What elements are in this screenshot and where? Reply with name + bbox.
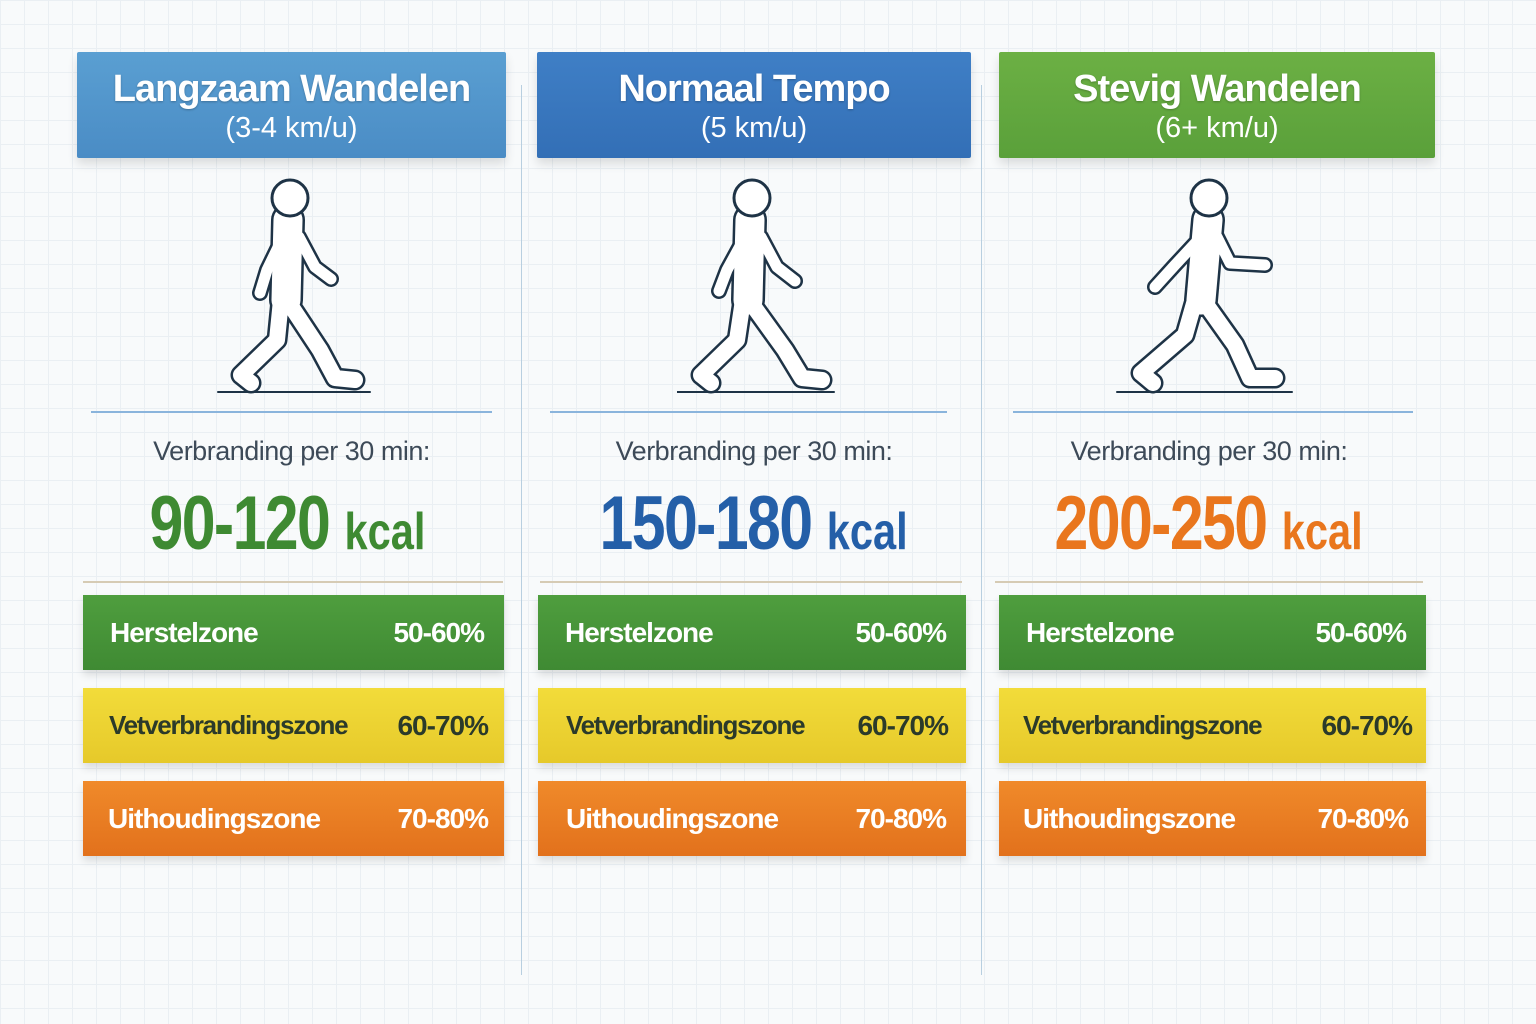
bar: Vetverbrandingszone: 60-70% <box>397 710 488 740</box>
header: Langzaam Wandelen <box>77 52 506 158</box>
bar: Vetverbrandingszone: 60-70% <box>1321 710 1412 740</box>
bar: Herstelzone <box>83 595 504 670</box>
zones column 3 <box>996 595 1428 864</box>
bar: Herstelzone <box>538 595 966 670</box>
bar: Uithoudingszone <box>538 781 966 856</box>
bar: Uithoudingszone: 70-80% <box>855 802 946 834</box>
kcal: 200-250: 200-250 kcal <box>1055 481 1363 566</box>
zones column 1 <box>80 595 506 864</box>
bar: Vetverbrandingszone: 60-70% <box>857 710 948 740</box>
bar: Vetverbrandingszone: Vetverbrandingszone <box>109 710 347 740</box>
header: Stevig Wandelen: (6+ km/u) <box>1155 112 1279 144</box>
text: burn label 1: Verbranding per 30 min: <box>153 436 430 466</box>
header: Stevig Wandelen: Stevig Wandelen <box>1073 68 1361 110</box>
icon: walker slow <box>217 178 371 394</box>
bar: Uithoudingszone: Uithoudingszone <box>566 802 778 834</box>
icon: walker normal <box>677 178 835 394</box>
bar: Uithoudingszone <box>999 781 1426 856</box>
bar: Uithoudingszone: 70-80% <box>397 802 488 834</box>
bar: Herstelzone: 50-60% <box>1315 616 1406 648</box>
bar: Vetverbrandingszone <box>999 688 1426 763</box>
header: Normaal Tempo: Normaal Tempo <box>618 68 890 110</box>
bar: Herstelzone <box>999 595 1426 670</box>
header: Stevig Wandelen <box>999 52 1435 158</box>
zones column 2 <box>536 595 968 864</box>
bar: Vetverbrandingszone: Vetverbrandingszone <box>1023 710 1261 740</box>
header: Normaal Tempo <box>537 52 971 158</box>
bar: Vetverbrandingszone <box>83 688 504 763</box>
bar: Herstelzone: Herstelzone <box>1026 616 1174 648</box>
icon: walker brisk <box>1116 178 1293 394</box>
bar: Uithoudingszone: 70-80% <box>1317 802 1408 834</box>
bar: Herstelzone: Herstelzone <box>110 616 258 648</box>
bar: Uithoudingszone: Uithoudingszone <box>1023 802 1235 834</box>
header: Normaal Tempo: (5 km/u) <box>701 112 807 144</box>
header: Langzaam Wandelen: Langzaam Wandelen <box>113 68 470 110</box>
kcal: 150-180: 150-180 kcal <box>600 481 908 566</box>
kcal: 90-120: 90-120 kcal <box>149 481 425 566</box>
bar: Vetverbrandingszone: Vetverbrandingszone <box>566 710 804 740</box>
header: Langzaam Wandelen: (3-4 km/u) <box>225 112 358 144</box>
bar: Uithoudingszone <box>83 781 504 856</box>
text: burn label 2: Verbranding per 30 min: <box>616 436 892 466</box>
bar: Herstelzone: Herstelzone <box>565 616 713 648</box>
bar: Uithoudingszone: Uithoudingszone <box>108 802 320 834</box>
bar: Herstelzone: 50-60% <box>855 616 946 648</box>
bar: Vetverbrandingszone <box>538 688 966 763</box>
bar: Herstelzone: 50-60% <box>393 616 484 648</box>
text: burn label 3: Verbranding per 30 min: <box>1071 436 1347 466</box>
